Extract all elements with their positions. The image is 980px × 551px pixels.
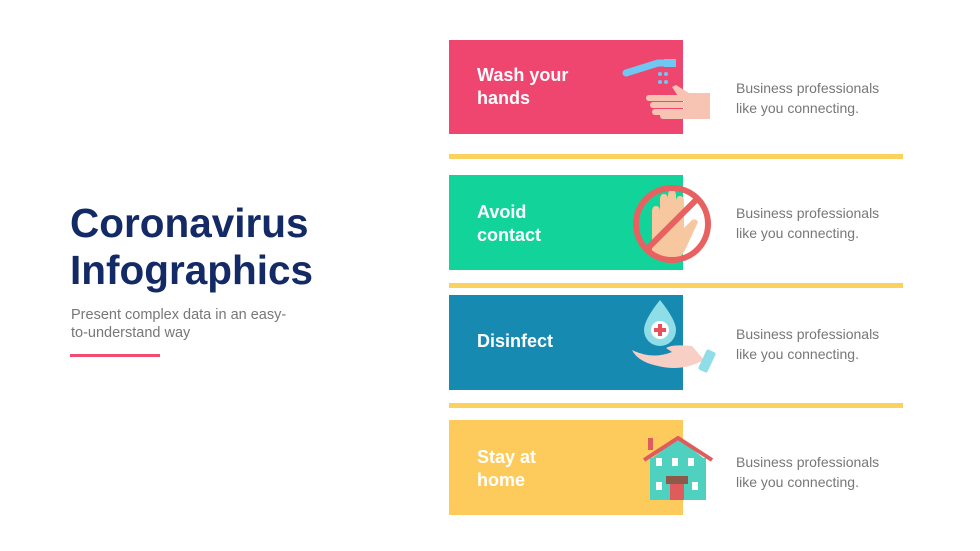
panel: disinfect: Disinfect xyxy=(477,331,553,351)
description 3 xyxy=(736,326,879,362)
description 2: Business professionals xyxy=(736,205,879,221)
panel: stay at home: home xyxy=(477,470,525,490)
accent underline xyxy=(70,354,160,357)
description 1 xyxy=(736,80,879,116)
panel: stay at home: Stay at xyxy=(477,447,536,467)
description 4: like you connecting. xyxy=(736,474,859,490)
panel: avoid contact xyxy=(449,175,683,270)
description 2 xyxy=(736,205,879,241)
icon: no hand xyxy=(633,185,711,263)
icon: drop and hand xyxy=(632,300,716,372)
subtitle xyxy=(71,307,286,341)
description 3: like you connecting. xyxy=(736,346,859,362)
panel: disinfect xyxy=(449,295,683,390)
title xyxy=(70,200,313,293)
panel: avoid contact: contact xyxy=(477,225,541,245)
title: Infographics xyxy=(70,247,313,293)
description 4 xyxy=(736,454,879,490)
panel: wash hands: hands xyxy=(477,88,530,108)
icon: house xyxy=(643,436,713,500)
description 2: like you connecting. xyxy=(736,224,859,240)
description 3: Business professionals xyxy=(736,326,879,342)
panel: wash hands xyxy=(449,40,683,134)
description 4: Business professionals xyxy=(736,454,879,470)
icon: tap and hand xyxy=(622,59,710,119)
panel: stay at home xyxy=(449,420,683,515)
panel: wash hands: Wash your xyxy=(477,65,568,85)
subtitle: to-understand way xyxy=(71,325,190,341)
description 1: Business professionals xyxy=(736,80,879,96)
title: Coronavirus xyxy=(70,200,309,246)
panel: avoid contact: Avoid xyxy=(477,202,526,222)
description 1: like you connecting. xyxy=(736,100,859,116)
subtitle: Present complex data in an easy- xyxy=(71,307,286,323)
